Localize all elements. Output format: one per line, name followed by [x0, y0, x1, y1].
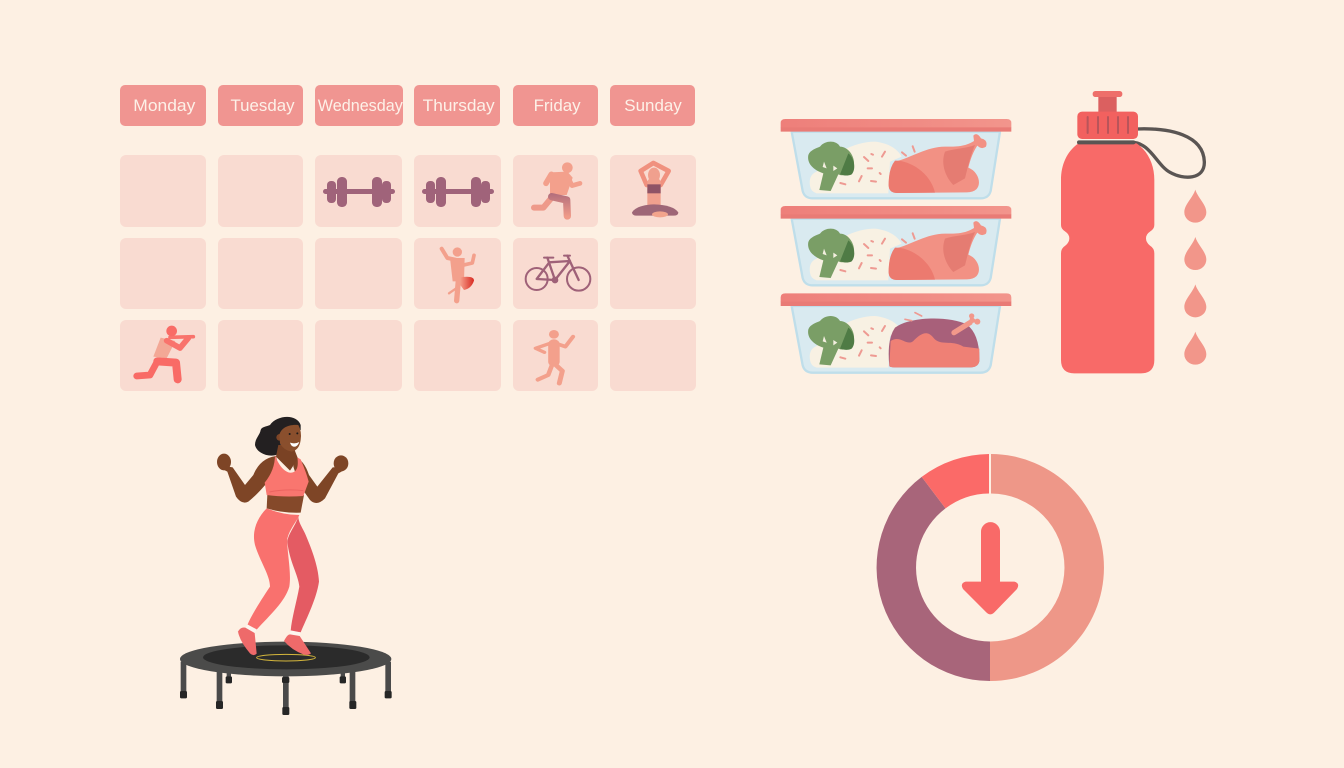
icon: yoga pose: [632, 163, 678, 217]
container 2: [781, 206, 1011, 285]
day headers: Wednesday: [318, 96, 403, 115]
sports bra: [265, 455, 309, 496]
water bottle: [1061, 91, 1206, 373]
midriff: [267, 495, 304, 513]
container 3: [781, 293, 1011, 373]
hair: [255, 417, 301, 456]
trampoline: [180, 642, 392, 715]
day headers: Friday: [534, 96, 581, 115]
woman upper body: [217, 417, 348, 513]
container 1: [781, 119, 1011, 198]
woman on trampoline: [180, 417, 392, 715]
bottle body: [1061, 143, 1154, 373]
water drops: [1184, 190, 1206, 365]
strap band: [1079, 136, 1133, 148]
icon: runner: [534, 162, 580, 216]
icon: walking figure: [536, 330, 573, 383]
icon: dumbbell Wednesday: [323, 177, 395, 207]
day headers: Tuesday: [230, 96, 295, 115]
icon: dancer: [442, 247, 474, 301]
arms: [217, 454, 348, 503]
bottle cap: [1077, 112, 1138, 139]
icon: dumbbell Thursday: [422, 177, 494, 207]
day headers: Thursday: [423, 96, 495, 115]
face: [276, 425, 301, 452]
woman legs: [238, 508, 319, 655]
donut chart: [877, 454, 1104, 681]
bottle nozzle: [1093, 91, 1122, 112]
day headers: [120, 85, 695, 126]
weekly calendar panel: [120, 85, 696, 391]
segment: left: [877, 477, 990, 681]
icon: bicycle: [526, 256, 590, 291]
segment: top: [922, 454, 989, 508]
icon: down arrow: [962, 522, 1018, 614]
calendar cells: [120, 155, 696, 391]
meal prep containers: [781, 119, 1011, 373]
day headers: Sunday: [624, 96, 682, 115]
bottle strap: [1132, 129, 1204, 177]
neck: [276, 445, 298, 471]
day headers: Monday: [133, 96, 196, 115]
icon: lunge with weight: [137, 326, 193, 379]
segment: right half: [990, 454, 1104, 681]
